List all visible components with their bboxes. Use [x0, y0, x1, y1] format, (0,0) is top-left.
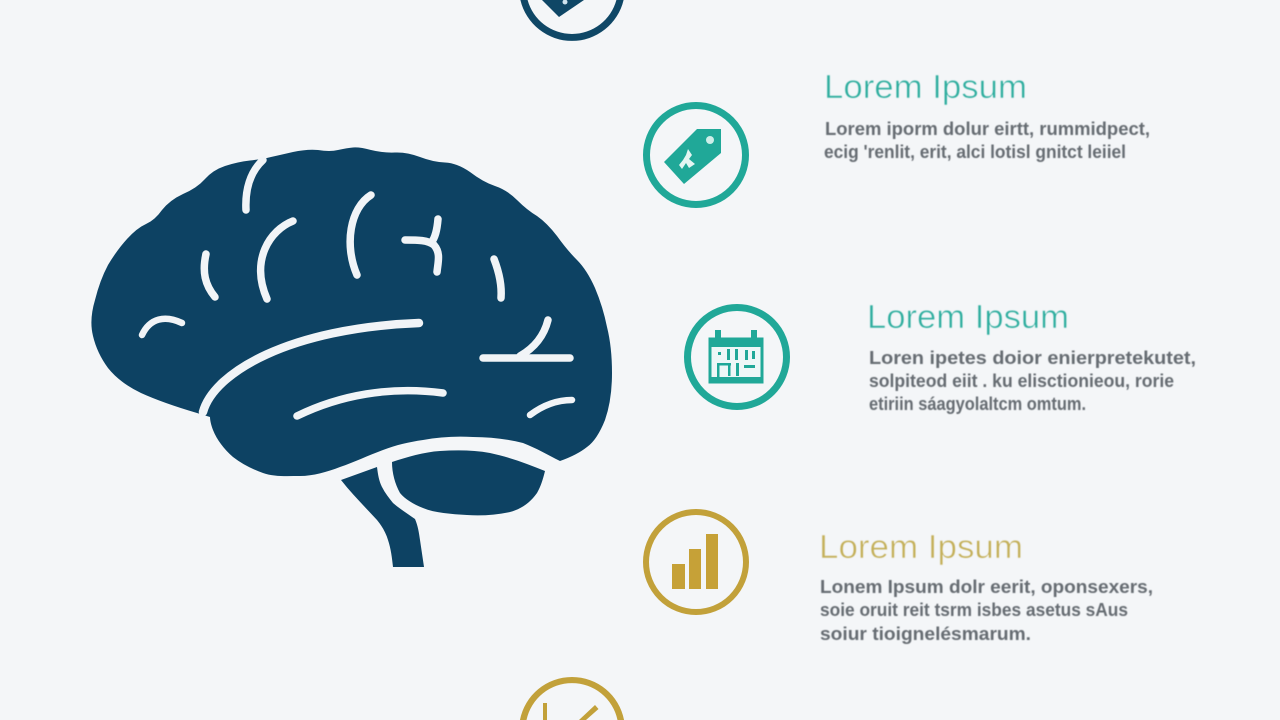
body: item two: Loren ipetes doior enierpretekutet, — [869, 348, 1196, 368]
text block: item three — [819, 528, 1153, 644]
body: item two — [869, 348, 1196, 414]
body: item three: soie oruit reit tsrm isbes asetus sAus — [820, 600, 1128, 620]
brain: stem — [341, 467, 424, 567]
icon: navy circle with tag tip — [520, 0, 624, 41]
brain: cerebellum — [392, 450, 545, 515]
body: item one: Lorem iporm dolur eirtt, rummidpect, — [825, 119, 1150, 139]
body: item two: etiriin sáagyolaltcm omtum. — [869, 394, 1086, 414]
body: item three — [820, 577, 1153, 644]
text block: item two — [867, 298, 1196, 414]
body: item one — [824, 119, 1150, 162]
icon: gold bar chart — [646, 512, 746, 612]
illustration: brain — [91, 147, 612, 567]
icon: teal calendar — [688, 308, 786, 406]
text block: item one — [824, 68, 1150, 162]
body: item three: soiur tioignelésmarum. — [820, 624, 1031, 644]
icon: teal price tag — [646, 106, 746, 204]
brain: fold lines — [142, 160, 572, 416]
body: item two: solpiteod eiit . ku elisctionieou, rorie — [869, 371, 1174, 391]
icon: gold circle with check — [520, 677, 624, 720]
body: item one: ecig 'renlit, erit, alci lotisl gnitct leiiel — [824, 142, 1126, 162]
heading: item one: Lorem Ipsum — [824, 68, 1027, 105]
heading: item three: Lorem Ipsum — [819, 528, 1023, 565]
body: item three: Lonem Ipsum dolr eerit, oponsexers, — [820, 577, 1153, 597]
brain: cerebrum silhouette — [91, 147, 612, 476]
heading: item two: Lorem Ipsum — [867, 298, 1069, 335]
